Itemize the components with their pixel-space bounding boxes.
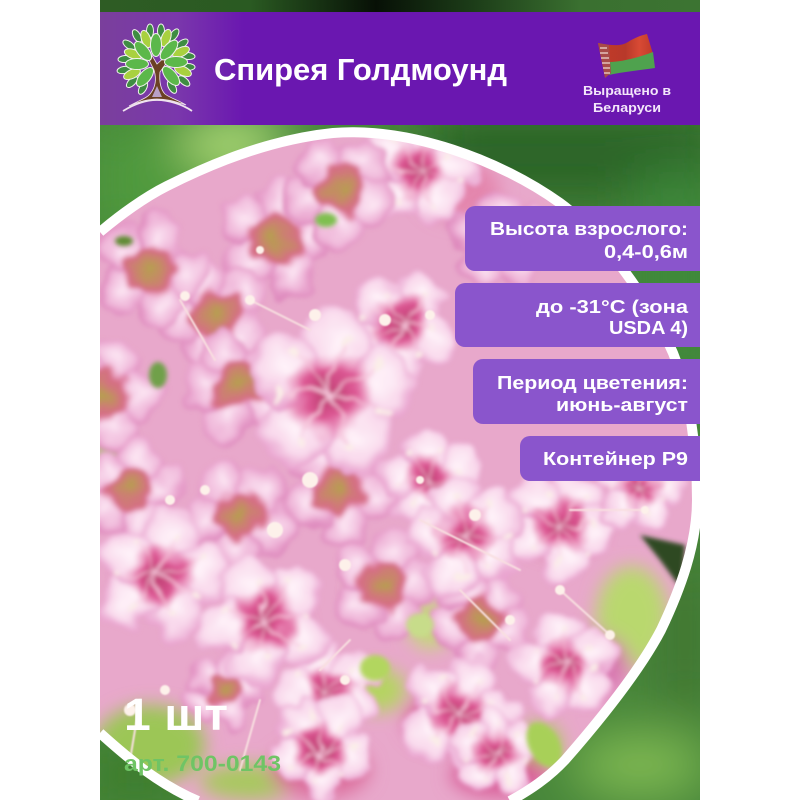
callout: flowering period: Период цветения:	[497, 372, 688, 393]
callout: container: Контейнер Р9	[543, 448, 688, 469]
background photo: green foliage	[100, 125, 700, 800]
infographic canvas	[100, 0, 700, 800]
dark leaf at the right edge	[640, 535, 685, 590]
made in Belarus caption: Беларуси	[593, 100, 661, 115]
made in Belarus caption: Выращено в	[583, 83, 671, 98]
top photo strip	[100, 0, 700, 13]
callout: frost hardiness	[455, 283, 700, 347]
title: Спирея Голдмоунд	[214, 52, 507, 87]
leaves	[116, 24, 195, 96]
article number: арт. 700-0143	[124, 751, 281, 776]
callout: adult height: 0,4-0,6м	[604, 241, 688, 262]
blossoms	[100, 138, 688, 800]
callout: frost hardiness: до -31°C (зона	[536, 296, 689, 317]
callout: flowering period: июнь-август	[556, 394, 688, 415]
callout: container	[520, 436, 700, 481]
flower photo in white circle	[100, 137, 692, 800]
icon: flag of Belarus	[598, 34, 655, 78]
callout: adult height: Высота взрослого:	[490, 218, 688, 239]
leaves peeking through	[115, 213, 569, 773]
callout: frost hardiness: USDA 4)	[609, 317, 688, 338]
quantity: 1 шт	[124, 689, 228, 740]
callout: adult height	[465, 206, 700, 271]
stamens	[130, 300, 645, 770]
product card	[100, 0, 700, 800]
tree trunk and ground	[123, 52, 192, 111]
white circle outline	[100, 132, 697, 800]
made in Belarus caption	[583, 83, 671, 115]
callout: flowering period	[473, 359, 700, 424]
icon: tree logo	[116, 24, 195, 111]
soft colour masses	[94, 160, 668, 800]
purple header banner	[100, 12, 700, 125]
